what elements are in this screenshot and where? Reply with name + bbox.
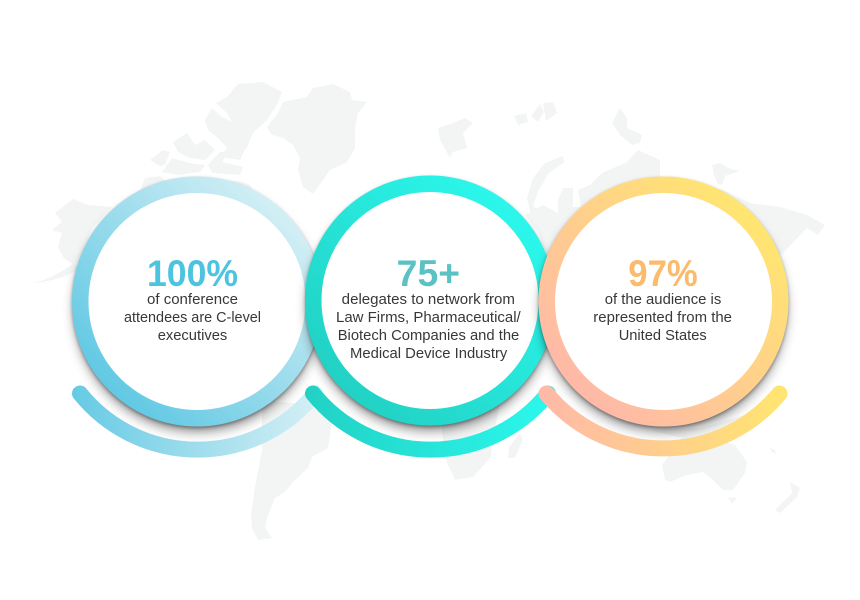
map: North America (120, 176, 300, 400)
text: audience: represented from the (593, 309, 732, 326)
text: delegates (336, 291, 522, 362)
map: Tasmania (728, 497, 737, 504)
map: Severnaya Zemlya (712, 163, 740, 185)
text: audience (593, 291, 732, 344)
soft shadow (75, 187, 319, 431)
text: delegates: delegates to network from (342, 291, 515, 308)
map: Australia (662, 436, 747, 490)
text: conference attendees: executives (158, 327, 227, 344)
text: delegates: Medical Device Industry (350, 345, 508, 362)
text: audience: United States (619, 327, 707, 344)
map: Madagascar (508, 433, 523, 458)
text: conference attendees: attendees are C-level (124, 309, 261, 326)
text: conference attendees: of conference (147, 291, 238, 308)
number: 75+: 75+ (397, 253, 460, 294)
map: Alaska (52, 199, 112, 266)
rim shadow (538, 178, 788, 428)
map: Scandinavia (527, 156, 564, 212)
rim shadow (305, 177, 555, 427)
arc: orange lower arc (546, 394, 780, 448)
arc: blue lower arc (80, 394, 315, 450)
white disc and blue ring (80, 185, 314, 418)
map: northern Russia (578, 150, 825, 300)
white disc and orange ring (547, 185, 780, 418)
text: delegates: Law Firms, Pharmaceutical/ (336, 309, 522, 326)
map: Novaya Zemlya (612, 108, 642, 145)
map: Pacific islet (770, 448, 776, 454)
panel: 100% stat circle (72, 178, 322, 431)
map: Europe (525, 188, 600, 300)
text: delegates: Biotech Companies and the (338, 327, 519, 344)
map: Baffin and Ellesmere (205, 82, 282, 160)
soft shadow (542, 187, 786, 431)
white disc and teal ring (313, 184, 547, 417)
panel: 97% stat circle (538, 178, 788, 431)
map: South America (251, 400, 332, 540)
panel: 75+ stat circle (305, 177, 555, 430)
map: Franz Josef Land (514, 102, 557, 125)
map: Africa (442, 400, 500, 480)
soft shadow (308, 186, 552, 430)
world map background (33, 82, 825, 540)
number: 97%: 97% (628, 253, 698, 294)
map: Southeast Asia (650, 415, 745, 440)
text: conference attendees (124, 291, 261, 344)
map: Greenland (267, 84, 367, 194)
map: Arctic archipelago (150, 133, 243, 175)
number: 100%: 100% (147, 253, 238, 294)
text: audience: of the audience is (605, 291, 721, 308)
arc: teal lower arc (313, 394, 548, 450)
map: Svalbard (438, 118, 473, 158)
rim shadow (72, 178, 322, 428)
map: New Zealand (775, 482, 800, 513)
map: Aleutian tail (33, 262, 78, 283)
